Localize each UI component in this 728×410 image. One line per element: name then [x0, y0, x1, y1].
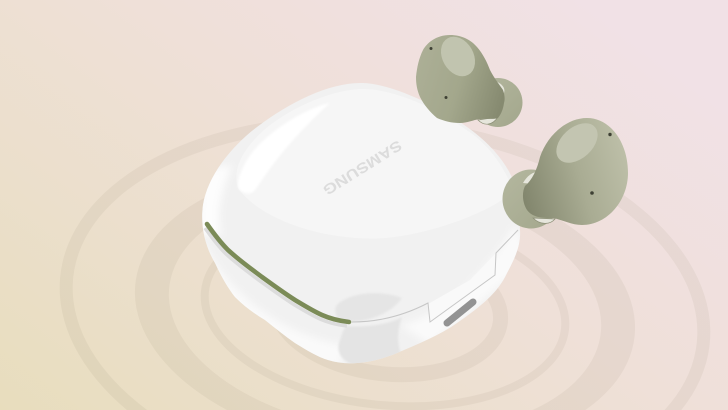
charging case: [195, 83, 530, 368]
lid glossy highlight: [238, 103, 330, 193]
highlight: [434, 31, 482, 82]
case body: [202, 83, 520, 363]
seam line and notch: [352, 230, 518, 322]
body: [416, 35, 505, 123]
case shading: [202, 168, 519, 363]
white rim on left and lower side: [214, 260, 339, 362]
sensor dots: [430, 47, 432, 50]
logo: SAMSUNG: [320, 136, 404, 198]
body: [523, 118, 628, 225]
lower grey reflection: [338, 319, 400, 363]
notch panel: [428, 254, 495, 321]
charging port: [447, 302, 473, 323]
grey band shadow: [205, 228, 347, 326]
ear tip: [474, 78, 522, 127]
sensor dots: [608, 133, 612, 136]
earbud: upper left: [416, 31, 522, 127]
earbud: lower right: [502, 115, 628, 228]
ear tip: [502, 170, 560, 228]
concentric ripple rings: [60, 116, 710, 410]
green seam band: [207, 224, 349, 322]
lid top surface: [236, 89, 513, 239]
speaker mesh glints: [523, 171, 540, 184]
speaker mesh glints: [492, 80, 504, 93]
grey hinge blotch: [335, 293, 402, 322]
highlight: [549, 115, 605, 171]
